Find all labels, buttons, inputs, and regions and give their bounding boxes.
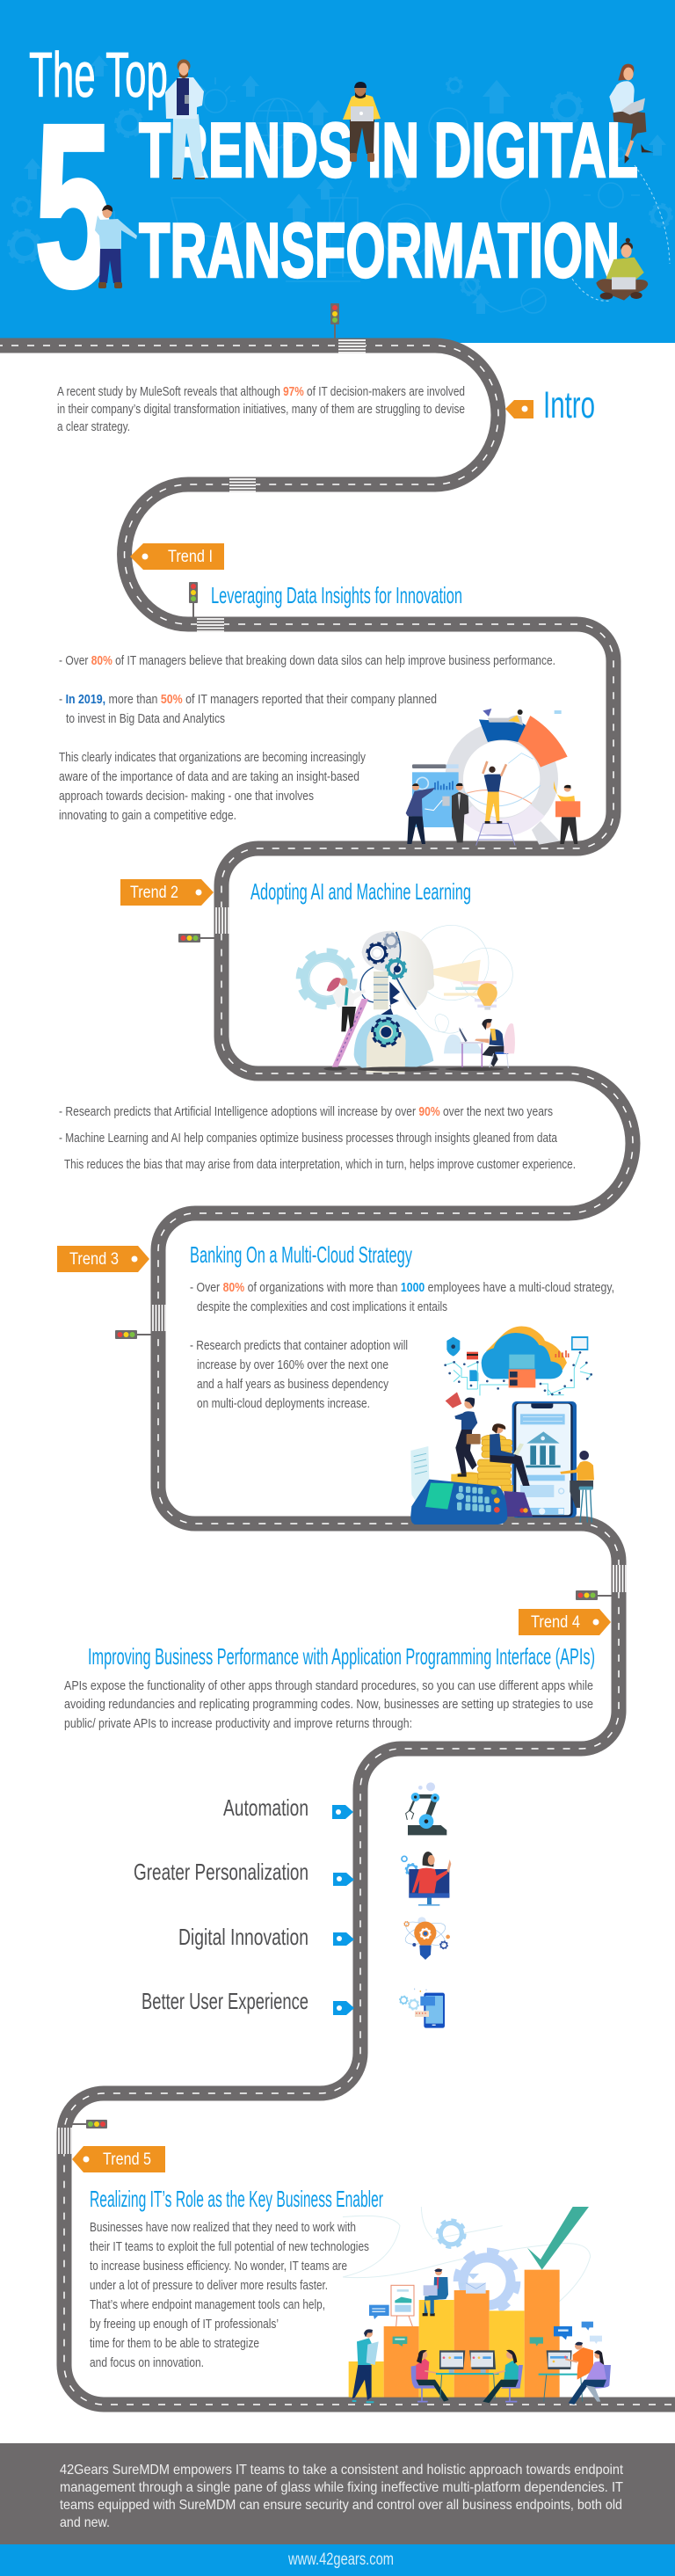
illustration: data insights team xyxy=(406,709,580,846)
website bar xyxy=(0,2544,675,2576)
traffic light: hero xyxy=(330,303,339,339)
traffic light: trend 4 xyxy=(576,1590,612,1600)
road xyxy=(0,346,675,2405)
crosswalks xyxy=(57,338,627,2154)
trend 1 bullets: - Over 80% of IT managers believe that breaking down data silos can help improve business performance. xyxy=(59,654,555,668)
trend 3 bullets: - Research predicts that container adoption will xyxy=(190,1339,408,1353)
trend 1 bullets: - In 2019, more than 50% of IT managers reported that their company planned xyxy=(59,693,437,707)
trend 4 paragraph xyxy=(64,1679,593,1731)
traffic light: trend 3 xyxy=(115,1330,151,1339)
trend 5 heading: Realizing IT’s Role as the Key Business Enabler xyxy=(90,2186,383,2212)
item: Greater Personalization: Greater Personalization xyxy=(134,1859,308,1885)
trend 5 paragraph: under a lot of pressure to deliver more results faster. xyxy=(90,2279,328,2293)
traffic light: trend 5 xyxy=(72,2120,107,2128)
trend 1 heading: Leveraging Data Insights for Innovation xyxy=(211,582,462,608)
intro text: in their company’s digital transformation initiatives, many of them are struggling to devise xyxy=(57,403,465,417)
footer panel: management through a single pane of glass while fixing ineffective multi-platform dependencies. IT xyxy=(60,2480,623,2495)
trend 5 paragraph: to increase business efficiency. No wonder, IT teams are xyxy=(90,2259,347,2274)
trend 5 paragraph: and focus on innovation. xyxy=(90,2356,204,2370)
person: woman sitting cross-legged with laptop xyxy=(596,238,648,301)
hero faint icon pattern xyxy=(9,55,672,314)
trend 3 bullets: despite the complexities and cost implications it entails xyxy=(197,1300,447,1314)
footer panel xyxy=(0,2443,675,2544)
trend 1 bullets: to invest in Big Data and Analytics xyxy=(66,712,225,726)
illustration: business bars and team xyxy=(343,2207,611,2405)
trend 4 paragraph: public/ private APIs to increase productivity and improve returns through: xyxy=(64,1717,412,1731)
trend 3 bullets: and a half years as business dependency xyxy=(197,1378,389,1392)
trend 1 paragraph: aware of the importance of data and are taking an insight-based xyxy=(59,770,359,784)
trend 1 tag: Trend I xyxy=(168,548,213,566)
trend 5 paragraph: Businesses have now realized that they need to work with xyxy=(90,2221,356,2235)
illustration: AI robot head xyxy=(298,925,515,1073)
trend 2 heading: Adopting AI and Machine Learning xyxy=(250,878,471,905)
intro tag xyxy=(505,400,533,418)
trend 4 tag xyxy=(519,1609,611,1635)
trend 3 heading: Banking On a Multi-Cloud Strategy xyxy=(190,1241,412,1268)
trend 1 tag xyxy=(130,543,224,570)
trend 2 bullets: - Machine Learning and AI help companies optimize business processes through insights gleaned from data xyxy=(59,1132,558,1146)
trend 1 paragraph: This clearly indicates that organizations are becoming increasingly xyxy=(59,751,367,765)
footer panel: teams equipped with SureMDM can ensure security and control over all business endpoints, both old xyxy=(60,2498,622,2513)
trend 1 paragraph: innovating to gain a competitive edge. xyxy=(59,809,236,823)
trend 5 paragraph: their IT teams to exploit the full potential of new technologies xyxy=(90,2240,369,2254)
icon: robot arm xyxy=(406,1782,446,1835)
trend 1 bullets xyxy=(59,654,555,726)
website bar: www.42gears.com xyxy=(287,2551,394,2569)
person: man holding head xyxy=(95,205,137,288)
trend 5 tag: Trend 5 xyxy=(103,2150,151,2169)
hero title: The Top xyxy=(29,40,168,111)
item: Digital Innovation: Digital Innovation xyxy=(178,1924,308,1950)
traffic light: trend 2 xyxy=(178,934,214,942)
trend 2 bullets xyxy=(59,1105,576,1172)
trend 5 tag xyxy=(72,2146,165,2172)
item: Better User Experience: Better User Experience xyxy=(142,1988,308,2014)
trend 5 paragraph: by freeing up enough of IT professionals’ xyxy=(90,2318,279,2332)
trend 2 bullets: - Research predicts that Artificial Intelligence adoptions will increase by over 90% over the next two years xyxy=(59,1105,553,1119)
trend 5 paragraph: That’s where endpoint management tools can help, xyxy=(90,2298,325,2312)
person: man in yellow shirt with laptop xyxy=(343,82,381,162)
trend 2 tag xyxy=(120,879,214,906)
trend 4 paragraph: avoiding redundancies and replicating programming codes. Now, businesses are setting up strategies to use xyxy=(64,1698,593,1712)
person: man with phone xyxy=(165,60,205,178)
trend 1 paragraph xyxy=(59,751,367,823)
trend 5 paragraph xyxy=(90,2221,369,2370)
footer panel: and new. xyxy=(60,2515,110,2530)
intro text: A recent study by MuleSoft reveals that although 97% of IT decision-makers are involved xyxy=(57,385,465,399)
person: woman with laptop sitting on title xyxy=(609,64,653,164)
trend 4 tag: Trend 4 xyxy=(531,1613,580,1632)
item: Automation: Automation xyxy=(223,1794,308,1821)
intro text: a clear strategy. xyxy=(57,420,130,434)
hero title: 5 xyxy=(34,76,112,335)
footer panel: 42Gears SureMDM empowers IT teams to take a consistent and holistic approach towards endpoint xyxy=(60,2463,623,2478)
trend 4 paragraph: APIs expose the functionality of other apps through standard procedures, so you can use different apps while xyxy=(64,1679,593,1693)
trend 3 tag: Trend 3 xyxy=(69,1250,119,1269)
intro text xyxy=(57,385,465,434)
illustration: cloud and mobile banking xyxy=(410,1326,594,1524)
traffic light: trend 1 xyxy=(189,582,198,618)
icon: innovation bulb xyxy=(403,1917,450,1960)
trend 5 paragraph: time for them to be able to strategize xyxy=(90,2337,259,2351)
trend 3 bullets xyxy=(190,1281,614,1411)
intro heading: Intro xyxy=(543,384,595,426)
trend 3 tag xyxy=(57,1246,149,1272)
hero dashed flight lines xyxy=(572,165,670,301)
trend 2 tag: Trend 2 xyxy=(130,884,178,902)
hero title xyxy=(29,40,638,335)
trend 3 bullets: on multi-cloud deployments increase. xyxy=(197,1397,370,1411)
trend 3 bullets: - Over 80% of organizations with more than 1000 employees have a multi-cloud strategy, xyxy=(190,1281,614,1295)
trend 3 bullets: increase by over 160% over the next one xyxy=(197,1358,388,1372)
hero banner background xyxy=(0,0,675,343)
icon: woman in monitor xyxy=(402,1852,451,1906)
icon: mobile app xyxy=(399,1989,445,2028)
trend 1 paragraph: approach towards decision- making - one that involves xyxy=(59,790,314,804)
